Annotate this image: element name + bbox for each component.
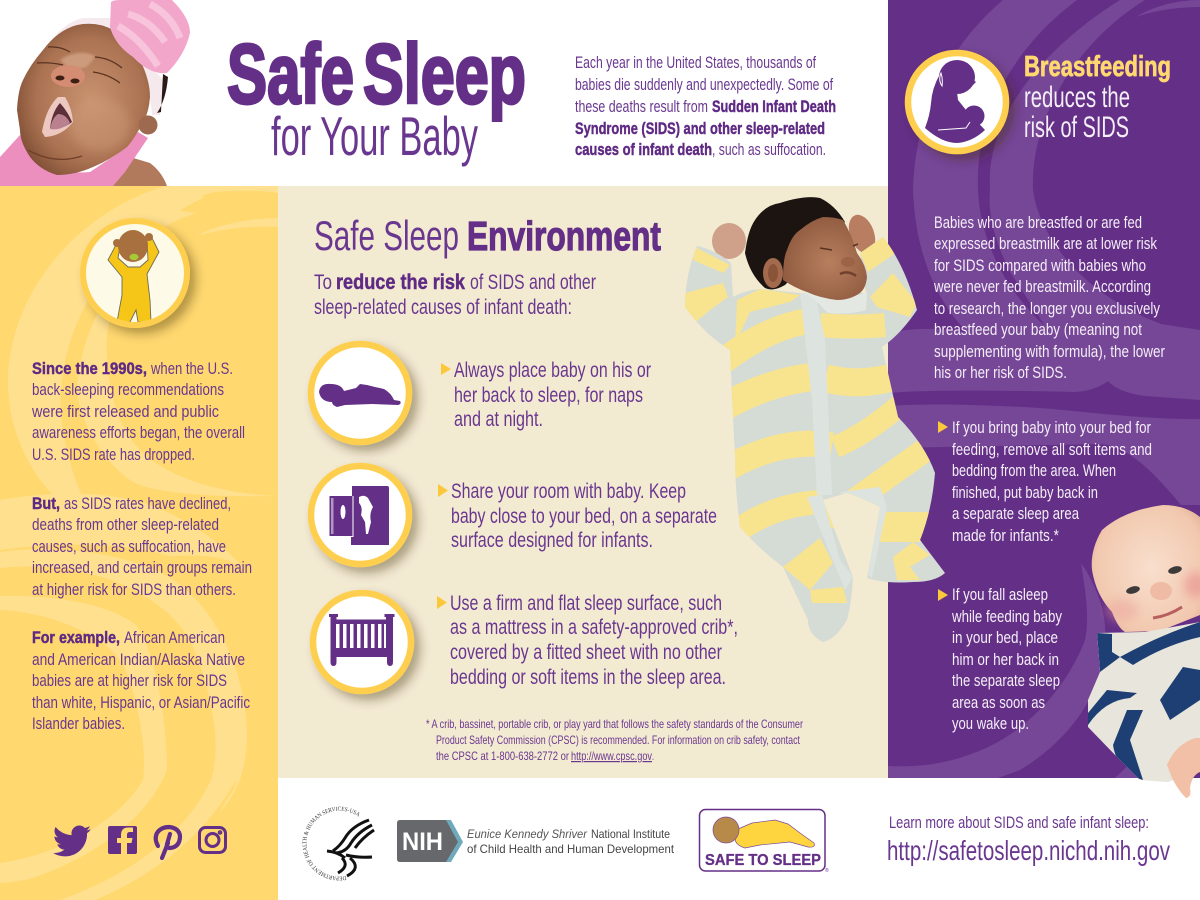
social icons: [53, 826, 226, 858]
panel: safe sleep environment background: [278, 186, 888, 778]
left facts text: and American Indian/Alaska Native: [32, 650, 245, 669]
left facts text: than white, Hispanic, or Asian/Pacific: [32, 693, 250, 712]
footnote: Product Safety Commission (CPSC) is recommended. For information on crib safety, contact: [436, 733, 800, 747]
bullet: back to sleep: Always place baby on his or: [454, 359, 651, 382]
bullet: share your room: baby close to your bed, on a separate: [451, 505, 717, 528]
heading: safe sleep environment: [314, 212, 661, 259]
intro text: Sudden Infant Death: [712, 97, 836, 116]
bullet: fall asleep: while feeding baby: [951, 607, 1062, 626]
left facts text: when the U.S.: [150, 359, 233, 378]
bullet: bed feeding: bedding from the area. When: [952, 461, 1116, 480]
photo: smiling baby: [1085, 505, 1200, 798]
logo: safe to sleep: SAFE TO SLEEP: [705, 852, 821, 869]
photo: yawning baby: [0, 0, 190, 186]
panel: breastfeeding background: [888, 0, 1200, 778]
intro text: Each year in the United States, thousands of: [575, 53, 816, 72]
breastfeeding body text: [933, 213, 1165, 382]
bullet: bed feeding: [938, 418, 1152, 545]
left facts text: Islander babies.: [32, 714, 125, 733]
intro text: Syndrome (SIDS) and other sleep-related: [575, 119, 825, 138]
intro text: , such as suffocation.: [712, 140, 826, 159]
breastfeeding body text: breastfeed your baby (meaning not: [934, 320, 1142, 339]
breastfeeding heading: [1024, 51, 1171, 144]
icon: crib: [313, 593, 411, 691]
subheading: reduce the risk: To: [314, 271, 332, 294]
logo: safe to sleep: [700, 810, 829, 874]
intro text: babies die suddenly and unexpectedly. Some of: [575, 75, 833, 94]
bullet: firm flat surface: Use a firm and flat sleep surface, such: [450, 592, 722, 615]
bullet: back to sleep: [441, 359, 651, 431]
subheading: reduce the risk: [314, 271, 596, 319]
breastfeeding heading: reduces the: [1024, 81, 1130, 114]
title: Sleep: [363, 27, 526, 121]
logo: NIH: National Institute: [591, 827, 670, 841]
bullet: bed feeding: made for infants.*: [952, 526, 1059, 545]
left facts text: deaths from other sleep-related: [32, 515, 219, 534]
icon: facebook: [108, 826, 137, 854]
left facts text: For example,: [32, 628, 120, 647]
left facts text: [31, 359, 252, 733]
logo: NIH: Eunice Kennedy Shriver: [467, 827, 588, 841]
icon: back-sleeping baby: [83, 221, 187, 325]
footnote: [426, 717, 803, 763]
bullet: share your room: [438, 480, 717, 552]
bullet: bed feeding: finished, put baby back in: [952, 483, 1098, 502]
breastfeeding body text: his or her risk of SIDS.: [934, 363, 1067, 382]
intro text: causes of infant death: [575, 140, 712, 159]
breastfeeding body text: Babies who are breastfed or are fed: [934, 213, 1142, 232]
bullet: fall asleep: him or her back in: [952, 650, 1059, 669]
left facts text: were first released and public: [31, 402, 219, 421]
logo: HHS eagle seal: DEPARTMENT OF HEALTH & HUMAN SERVICES-USA: [302, 806, 360, 881]
heading: safe sleep environment: Safe Sleep: [314, 212, 459, 259]
bullet: fall asleep: the separate sleep: [952, 671, 1060, 690]
intro text: these deaths result from: [575, 97, 708, 116]
footnote: http://www.cpsc.gov: [571, 749, 652, 763]
icon: twitter: [53, 826, 91, 856]
bullet: back to sleep: and at night.: [454, 408, 543, 431]
title: [227, 27, 526, 167]
bullet: bed feeding: a separate sleep area: [952, 504, 1079, 523]
logo: NIH: of Child Health and Human Development: [467, 842, 675, 856]
left facts text: causes, such as suffocation, have: [32, 537, 226, 556]
footnote: the CPSC at 1-800-638-2772 or: [436, 749, 569, 763]
subheading: reduce the risk: of SIDS and other: [470, 271, 596, 294]
title: Safe: [227, 27, 354, 121]
bullet: bed feeding: If you bring baby into your bed for: [952, 418, 1151, 437]
learn more call to action: [887, 813, 1170, 866]
left facts text: But,: [32, 494, 60, 513]
bullet: fall asleep: If you fall asleep: [952, 585, 1048, 604]
bullet: firm flat surface: bedding or soft items in the sleep area.: [450, 666, 726, 689]
bullet: share your room: surface designed for infants.: [451, 529, 653, 552]
bullet: share your room: Share your room with baby. Keep: [451, 480, 686, 503]
icon: baby on back: [311, 344, 409, 442]
subheading: reduce the risk: sleep-related causes of infant death:: [314, 296, 572, 319]
left facts text: at higher risk for SIDS than others.: [32, 580, 236, 599]
left facts text: Since the 1990s,: [32, 359, 147, 378]
left facts text: increased, and certain groups remain: [32, 558, 252, 577]
heading: safe sleep environment: Environment: [467, 213, 661, 259]
panel: left facts: [0, 186, 278, 900]
subheading: reduce the risk: reduce the risk: [336, 271, 465, 294]
bullet: firm flat surface: as a mattress in a safety-approved crib*,: [450, 616, 738, 639]
bullet: back to sleep: her back to sleep, for naps: [454, 384, 643, 407]
logo: NIH: NIH: [402, 828, 443, 856]
left facts text: back-sleeping recommendations: [32, 380, 224, 399]
left facts text: awareness efforts began, the overall: [32, 423, 245, 442]
breastfeeding heading: risk of SIDS: [1024, 111, 1129, 144]
photo: sleeping baby in striped onesie: [680, 197, 950, 645]
icon: room sharing: [311, 466, 409, 564]
footnote: * A crib, bassinet, portable crib, or play yard that follows the safety standards of the Consumer: [426, 717, 803, 731]
intro text: [575, 53, 836, 159]
bullet: fall asleep: in your bed, place: [952, 628, 1058, 647]
bullet: fall asleep: area as soon as: [952, 693, 1045, 712]
bullet: firm flat surface: [437, 592, 738, 689]
icon: instagram: [200, 828, 226, 852]
icon: mother and child silhouette: [925, 60, 985, 143]
icon: pinterest: [156, 827, 180, 858]
left facts text: as SIDS rates have declined,: [64, 494, 231, 513]
breastfeeding emblem: [908, 53, 1006, 151]
footnote: .: [652, 749, 654, 763]
bullet: firm flat surface: covered by a fitted sheet with no other: [450, 641, 722, 664]
title: for Your Baby: [271, 105, 478, 167]
breastfeeding body text: for SIDS compared with babies who: [934, 256, 1146, 275]
logo: safe to sleep: ®: [825, 867, 829, 874]
left facts text: African American: [124, 628, 225, 647]
logo: NIH: [397, 820, 675, 862]
bullet: fall asleep: [938, 585, 1062, 733]
left facts text: U.S. SIDS rate has dropped.: [32, 445, 195, 464]
bullet: fall asleep: you wake up.: [952, 714, 1029, 733]
left facts text: babies are at higher risk for SIDS: [32, 671, 227, 690]
bullet: bed feeding: feeding, remove all soft items and: [952, 440, 1152, 459]
